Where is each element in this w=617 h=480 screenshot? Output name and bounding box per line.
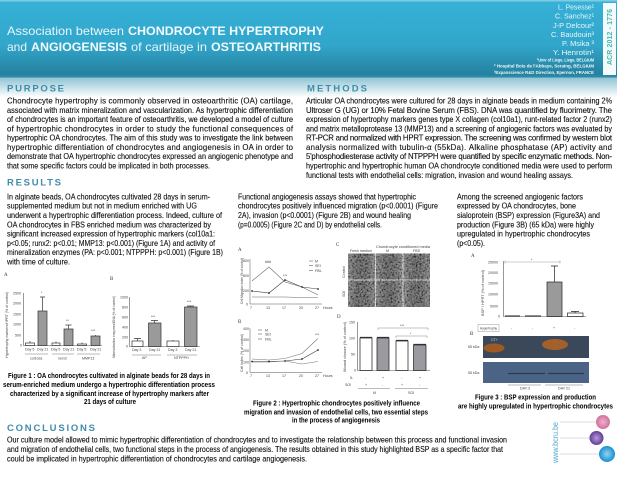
chart: figure 1A bars: A xyxy=(4,273,8,278)
text: results column 3: expressed by OA chondrocytes, bone xyxy=(457,202,576,211)
chart: figure 1B bars: *** xyxy=(187,300,192,304)
text: results column 3 xyxy=(457,192,600,248)
title xyxy=(7,24,324,54)
text: methods: analysis normalized with tubulin-α (55kDa). Alkaline phosphatase (AP) activity and xyxy=(306,143,612,152)
chart: figure 2D bars: D xyxy=(337,315,341,320)
title: of cartilage in xyxy=(131,40,207,54)
chart: figure 1A bars: 500 xyxy=(15,334,21,338)
chart: figure 1A bars: Day 5 xyxy=(51,348,60,352)
chart: figure 2D bars: *** xyxy=(400,324,405,328)
chart: figure 2A migration line chart: M xyxy=(315,260,318,264)
western blot: figure 3B: DAY 21 xyxy=(558,386,570,390)
affiliations: ² Hospital Bois de l'Abbaye, Seraing, BELGIUM xyxy=(494,64,594,68)
chart: figure 2A migration line chart: *** xyxy=(283,274,288,278)
text: results column 2 xyxy=(238,192,438,229)
chart: figure 3A bars: BSP / HPRT (% of control) xyxy=(481,270,485,316)
micrographs: figure 2C wound healing: FBS xyxy=(413,249,421,253)
chart: figure 3A bars: * xyxy=(531,258,533,262)
chart: figure 1B bars: AP xyxy=(142,356,147,360)
chart: figure 1A bars: Day 5 xyxy=(25,348,34,352)
chart: figure 1A bars: 2500 xyxy=(13,292,21,296)
chart: figure 2D bars: + xyxy=(365,383,367,387)
authors: C. Sanchez¹ xyxy=(555,12,594,20)
chart: figure 2D bars: Wound closure (% of control) xyxy=(343,322,347,372)
chart: figure 2A migration line chart: Hours xyxy=(323,306,333,310)
title: OSTEOARTHRITIS xyxy=(211,40,321,54)
text: purpose: Chondrocyte hypertrophy is commonly observed in osteoarthritic (OA) cartilage, xyxy=(7,96,293,106)
micrographs: figure 2C wound healing xyxy=(336,243,430,307)
chart: figure 1A bars: Day 21 xyxy=(90,348,101,352)
chart: figure 2A migration line chart: 0 xyxy=(246,302,248,306)
text: purpose: of hypertrophic chondrocytes in order to study the functional consequences of xyxy=(7,124,294,133)
label: hypertrophy row: - xyxy=(574,326,576,330)
chart: figure 2A migration line chart: 13 xyxy=(266,306,270,310)
chart: figure 1B bars: 400 xyxy=(122,326,128,330)
chart: figure 1A bars: 0 xyxy=(20,344,22,348)
text: purpose: hypertrophic differentiation of chondrocytes and angiogenesis in OA in order to xyxy=(7,143,294,152)
chart: figure 2D bars: * xyxy=(410,332,412,336)
chart: figure 1A bars: Day 21 xyxy=(37,348,48,352)
text: methods: Ultroser G (UG) or 10% Fetal Bovine Serum (FBS). DNA was quantified by fluorimetry. The xyxy=(306,106,612,115)
chart: figure 2D bars: + xyxy=(419,376,421,380)
text: purpose xyxy=(7,96,294,170)
text: purpose: demonstrate that OA hypertrophic chondrocytes expressed an angiogenic phenotype and xyxy=(7,152,293,161)
chart: figure 1A bars: Day 21 xyxy=(63,348,74,352)
chart: figure 1A bars: *** xyxy=(91,329,96,333)
text: conclusions: Our culture model allowed to mimic hypertrophic differentiation of chondrocytes and to investigate the relationship between this process and functional invasion xyxy=(7,436,507,444)
chart: figure 1B bars: Day 3 xyxy=(132,348,141,352)
western blot: figure 3B: 55 kDa xyxy=(468,371,479,375)
text: results column 1 xyxy=(6,192,223,266)
chart: figure 2D bars: M xyxy=(373,391,376,395)
chart: figure 2D bars: - xyxy=(401,376,403,380)
authors: P. Msika ³ xyxy=(562,39,594,48)
text: results column 1: OA chondrocytes in FBS enriched medium was characterized by xyxy=(7,220,211,229)
chart: figure 2D bars xyxy=(337,315,430,395)
chart: figure 1A bars: 1000 xyxy=(13,322,21,326)
chart: figure 2B invasion line chart: FBL xyxy=(265,338,272,342)
caption: figure 1: Figure 1 : OA chondrocytes cultivated in alginate beads for 28 days in xyxy=(8,371,210,380)
chart: figure 2A migration line chart: 20 xyxy=(299,306,303,310)
chart: figure 1A bars: 2000 xyxy=(13,302,21,306)
header banner xyxy=(0,0,617,75)
western blot: figure 3B: DAY 3 xyxy=(520,386,530,390)
chart: figure 2A migration line chart: 7 xyxy=(250,306,252,310)
text: results column 3: (p<0.05). xyxy=(457,239,485,248)
text: results column 1: mineralization enzymes (PA: p<0.001; NTPPPH: p<0.001) (Figure 1B) xyxy=(7,248,223,257)
chart: figure 1B bars: B xyxy=(110,277,114,282)
chart: figure 2B invasion line chart: 100 xyxy=(243,360,249,364)
chart: figure 3A bars: 5000 xyxy=(490,304,498,308)
chart: figure 2B invasion line chart: *** xyxy=(315,333,320,337)
western blot: figure 3B: CT+ xyxy=(491,338,498,342)
text: results column 1: underwent a hypertrophic differentiation process. Indeed, culture of xyxy=(7,211,223,220)
chart: figure 3A bars: 15000 xyxy=(488,282,498,286)
text: conclusions: and migration of endothelial cells, two functional steps in the process of angiogenesis. The results obtained in this study highlighted BSP as a specific factor that xyxy=(7,445,504,454)
text: results column 3: sialoprotein (BSP) expression (Figure3A) and xyxy=(457,211,600,220)
text: methods: RT-PCR and normalized with HPRT expression. The screening was confirmed by western blot xyxy=(306,134,613,143)
caption: figure 2: Figure 2 : Hypertrophic chondrocytes positively influence xyxy=(253,398,420,408)
caption: figure 2: in the process of angiogenesis xyxy=(292,416,380,424)
authors xyxy=(551,2,594,57)
chart: figure 2B invasion line chart: 400 xyxy=(243,327,249,331)
caption: figure 3 xyxy=(458,392,613,410)
chart: figure 2A migration line chart: 17 xyxy=(282,306,286,310)
text: purpose: of chondrocytes is an important feature of osteoarthritis, we developed a model of culture xyxy=(7,115,293,124)
chart: figure 2A migration line chart: 600 xyxy=(243,274,249,278)
chart: figure 1A bars: Hypertrophy markers/HPRT (% of control) xyxy=(5,292,9,358)
heading: purpose: PURPOSE xyxy=(7,84,64,94)
text: purpose: associated with matrix mineralization and vascularization. As hypertrophic differentiation xyxy=(7,106,293,115)
chart: figure 2A migration line chart: 200 xyxy=(243,289,249,293)
chart: figure 2B invasion line chart: B xyxy=(238,320,242,325)
chart: figure 1B bars: Mineralization enzymes/DNA (% of control) xyxy=(112,296,116,358)
authors: L. Pesesse¹ xyxy=(558,2,594,12)
chart: figure 1A bars: 1500 xyxy=(13,312,21,316)
chart: figure 1A bars: MMP13 xyxy=(82,356,94,360)
chart: figure 2B invasion line chart: 13 xyxy=(266,374,270,378)
chart: figure 2B invasion line chart: SEI xyxy=(265,332,271,336)
chart: figure 2B invasion line chart: 27 xyxy=(315,374,319,378)
micrographs: figure 2C wound healing: C xyxy=(336,243,340,248)
chart: figure 3A bars: 20000 xyxy=(488,271,498,275)
title: ANGIOGENESIS xyxy=(31,40,127,54)
chart: figure 1B bars: Day 21 xyxy=(149,348,160,352)
title: and xyxy=(7,40,27,54)
chart: figure 2D bars: - xyxy=(365,376,367,380)
label: hypertrophy row: + xyxy=(553,326,555,330)
chart: figure 2A migration line chart xyxy=(238,248,333,310)
label: hypertrophy row xyxy=(478,324,576,332)
chart: figure 2A migration line chart: ### xyxy=(265,260,271,264)
authors: J-P Delcour² xyxy=(553,21,594,30)
chart: figure 3A bars: 25000 xyxy=(488,260,498,264)
chart: figure 2D bars: 100 xyxy=(349,336,355,340)
caption: figure 1: characterized by a significant increase of hypertrophy markers after xyxy=(10,389,209,398)
text: results column 2: 2A), invasion (p<0.0001) (Figure 2B) and wound healing xyxy=(238,211,411,220)
chart: figure 2A migration line chart: A xyxy=(238,248,242,253)
header fade band xyxy=(0,75,617,98)
heading: results: RESULTS xyxy=(7,178,61,188)
chart: figure 2B invasion line chart: 20 xyxy=(299,374,303,378)
chart: figure 2D bars: SOI xyxy=(345,383,351,387)
title: Association between xyxy=(7,24,124,38)
text: results column 3: upregulated in hypertrophic chondrocytes xyxy=(457,230,590,239)
chart: figure 3A bars: 10000 xyxy=(488,292,498,296)
chart: figure 3A bars xyxy=(471,254,586,318)
micrographs: figure 2C wound healing: SOI xyxy=(342,291,346,297)
text: methods: functional tests with endothelial cells: migration, invasion and wound healing assays. xyxy=(306,171,573,180)
micrographs: figure 2C wound healing: Fresh medium xyxy=(350,249,372,253)
chart: figure 2A migration line chart: Cell Migration index (% of control) xyxy=(240,258,244,304)
icon: cell images xyxy=(560,415,615,462)
chart: figure 1A bars: * xyxy=(41,291,43,295)
chart: figure 2B invasion line chart: M xyxy=(265,328,268,332)
chart: figure 2D bars: + xyxy=(401,383,403,387)
chart: figure 2B invasion line chart: 300 xyxy=(243,338,249,342)
chart: figure 2B invasion line chart: Hours xyxy=(323,374,333,378)
abstract number tag: ACR 2012 - 1776 xyxy=(607,9,614,65)
chart: figure 2A migration line chart: FBL xyxy=(315,269,322,273)
website url: www.bcru.be xyxy=(551,422,560,464)
caption: figure 1: serum-enriched medium undergo a hypertrophic differentiation process xyxy=(3,380,215,389)
chart: figure 1B bars: 1000 xyxy=(120,296,128,300)
chart: figure 2D bars: - xyxy=(382,383,384,387)
chart: figure 1B bars: 800 xyxy=(122,306,128,310)
chart: figure 1A bars: Day 5 xyxy=(77,348,86,352)
chart: figure 1A bars: ** xyxy=(66,319,69,323)
text: purpose: that some specific factors could be implicated in both processes. xyxy=(7,162,210,170)
micrographs: figure 2C wound healing: Chondrocyte conditioned media xyxy=(376,245,430,249)
chart: figure 1A bars: runx2 xyxy=(58,356,67,360)
chart: figure 2A migration line chart: 27 xyxy=(315,306,319,310)
chart: figure 1B bars: Day 21 xyxy=(185,348,196,352)
text: methods xyxy=(306,96,613,180)
chart: figure 1B bars: 0 xyxy=(126,344,128,348)
affiliations: ¹Univ of Liege, Liege, BELGIUM xyxy=(537,58,594,62)
text: results column 2: (p=0.0005) (Figure 2C and D) by endothelial cells. xyxy=(238,220,382,229)
chart: figure 2D bars: IL xyxy=(350,376,353,380)
text: results column 3: Among the screened angiogenic factors xyxy=(457,192,583,202)
chart: figure 1B bars: 200 xyxy=(122,336,128,340)
chart: figure 2A migration line chart: SEI xyxy=(315,264,321,268)
chart: figure 1B bars xyxy=(110,277,200,360)
affiliations xyxy=(494,58,594,75)
text: purpose: hypertrophic OA chondrocytes. The aim of this study was to investigate the link between xyxy=(7,134,293,143)
text: results column 3: production (Figure 3B) (65 kDa) were highly xyxy=(457,220,594,229)
chart: figure 2B invasion line chart: 17 xyxy=(282,374,286,378)
label: hypertrophy row: - xyxy=(532,326,534,330)
label: hypertrophy row: - xyxy=(511,326,513,330)
text: results column 2: Functional angiogenesis assays showed that hypertrophic xyxy=(238,192,416,202)
caption: figure 2: migration and invasion of endothelial cells, two essential steps xyxy=(244,408,428,416)
chart: figure 3A bars: A xyxy=(471,254,475,259)
label: hypertrophy row: Hypertrophy xyxy=(480,326,497,330)
text: results column 1: supplemented medium but not in medium enriched with UG xyxy=(7,202,197,211)
caption: figure 1: 21 days of culture xyxy=(84,397,136,406)
chart: figure 2D bars: + xyxy=(382,376,384,380)
heading: conclusions: CONCLUSIONS xyxy=(7,423,95,434)
text: results column 1: with time of culture. xyxy=(6,258,70,266)
abstract number tag xyxy=(603,3,616,75)
chart: figure 1B bars: *** xyxy=(151,315,156,319)
chart: figure 2D bars: SOI xyxy=(408,391,414,395)
text: results column 1: In alginate beads, OA chondrocytes cultivated 28 days in serum- xyxy=(7,192,210,202)
chart: figure 1A bars xyxy=(4,273,102,360)
caption: figure 1 xyxy=(3,371,215,406)
chart: figure 1B bars: NTPPPH xyxy=(174,356,189,360)
western blot: figure 3B: B xyxy=(470,332,474,337)
chart: figure 2B invasion line chart: 200 xyxy=(243,349,249,353)
text: methods: 5'phosphodiesterase activity of NTPPPH were quantified by specific enzymatic methods. Non- xyxy=(306,152,612,161)
chart: figure 1B bars: 600 xyxy=(122,316,128,320)
authors: C. Baudouin³ xyxy=(551,30,594,39)
chart: figure 2D bars: - xyxy=(419,383,421,387)
text: results column 2: chondrocytes positively influenced migration (p<0.0001) (Figure xyxy=(238,202,438,211)
caption: figure 2 xyxy=(244,398,428,424)
western blot: figure 3B xyxy=(468,332,589,390)
chart: figure 2D bars: 150 xyxy=(349,320,355,324)
chart: figure 2B invasion line chart: 0 xyxy=(246,371,248,375)
heading: methods: METHODS xyxy=(307,84,367,94)
chart: figure 1A bars: col10a1 xyxy=(30,356,43,360)
micrographs: figure 2C wound healing: M xyxy=(386,249,389,253)
text: results column 1: p<0.05; runx2: p<0.01; MMP13: p<0.001) (Figure 1A) and activity of xyxy=(7,239,216,248)
chart: figure 2B invasion line chart: 7 xyxy=(250,374,252,378)
western blot: figure 3B: 65 kDa xyxy=(468,345,479,349)
chart: figure 2B invasion line chart xyxy=(238,320,333,378)
text: results column 1: significant increased expression of hypertrophic markers (col10a1: xyxy=(7,230,215,239)
chart: figure 1B bars: Day 3 xyxy=(168,348,177,352)
title: CHONDROCYTE HYPERTROPHY xyxy=(128,24,324,38)
authors: Y. Henrotin¹ xyxy=(553,48,594,57)
affiliations: ³Expanscience R&D Direction, Epernon, FRANCE xyxy=(494,70,594,75)
text: conclusions xyxy=(7,436,507,464)
chart: figure 2A migration line chart: 800 xyxy=(243,259,249,263)
chart: figure 2B invasion line chart: Cell Index (% of control) xyxy=(240,334,244,372)
chart: figure 2D bars: 0 xyxy=(354,368,356,372)
text: conclusions: could be implicated in hypertrophic differentiation of chondrocytes and cartilage angiogenesis. xyxy=(7,454,307,464)
chart: figure 3A bars: 0 xyxy=(498,314,500,318)
micrographs: figure 2C wound healing: Control xyxy=(342,266,346,278)
chart: figure 2D bars: 50 xyxy=(351,352,355,356)
